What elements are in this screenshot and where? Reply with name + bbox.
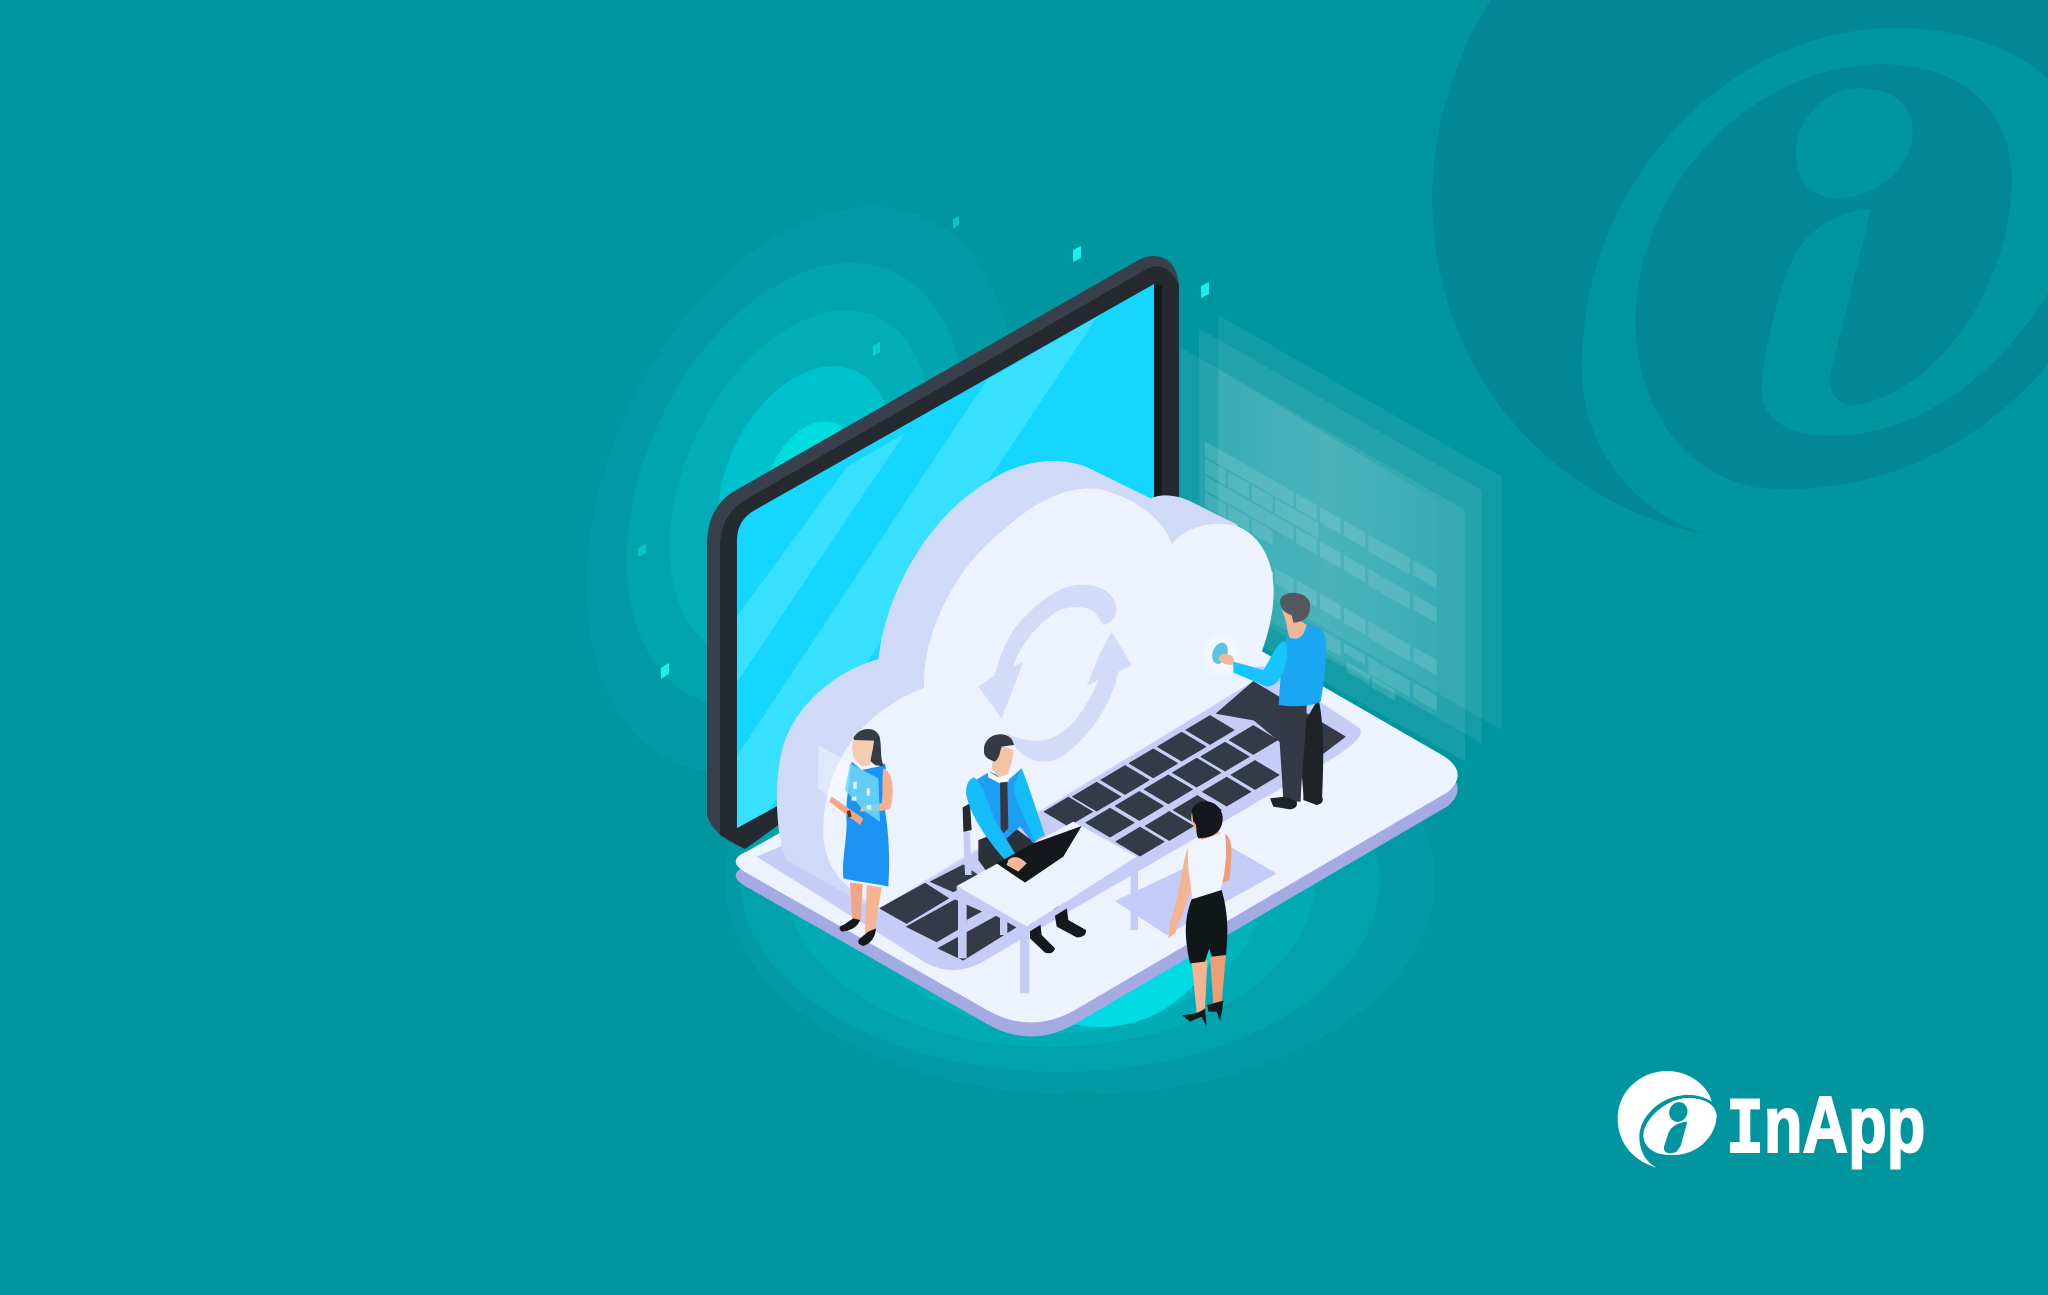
glow rings behind screen (501, 138, 1099, 842)
logo wordmark: InApp (1726, 1081, 1925, 1176)
desk legs (958, 867, 1138, 993)
laptop deck (736, 604, 1458, 1036)
cloud (777, 461, 1274, 912)
glow rings below deck (725, 665, 1435, 1095)
desk and trackpad (818, 729, 1277, 1027)
standing woman with hologram (818, 729, 893, 946)
icon: touch button (1209, 640, 1231, 666)
keyboard recess (757, 667, 1361, 970)
trackpad (1115, 847, 1277, 935)
sparkles (638, 216, 1209, 679)
floating code sheets (1179, 315, 1502, 762)
laptop on desk (997, 826, 1082, 883)
icon: sync arrows (978, 585, 1132, 762)
watermark logo (1432, 0, 2048, 543)
desk top (957, 822, 1137, 927)
keyboard keys (880, 682, 1345, 960)
standing woman from behind (1168, 801, 1231, 1027)
laptop screen (707, 256, 1179, 858)
InApp logo (1618, 1071, 1925, 1176)
seated man (963, 734, 1086, 953)
man pressing cloud button (1200, 593, 1326, 809)
logo mark (1618, 1071, 1717, 1168)
